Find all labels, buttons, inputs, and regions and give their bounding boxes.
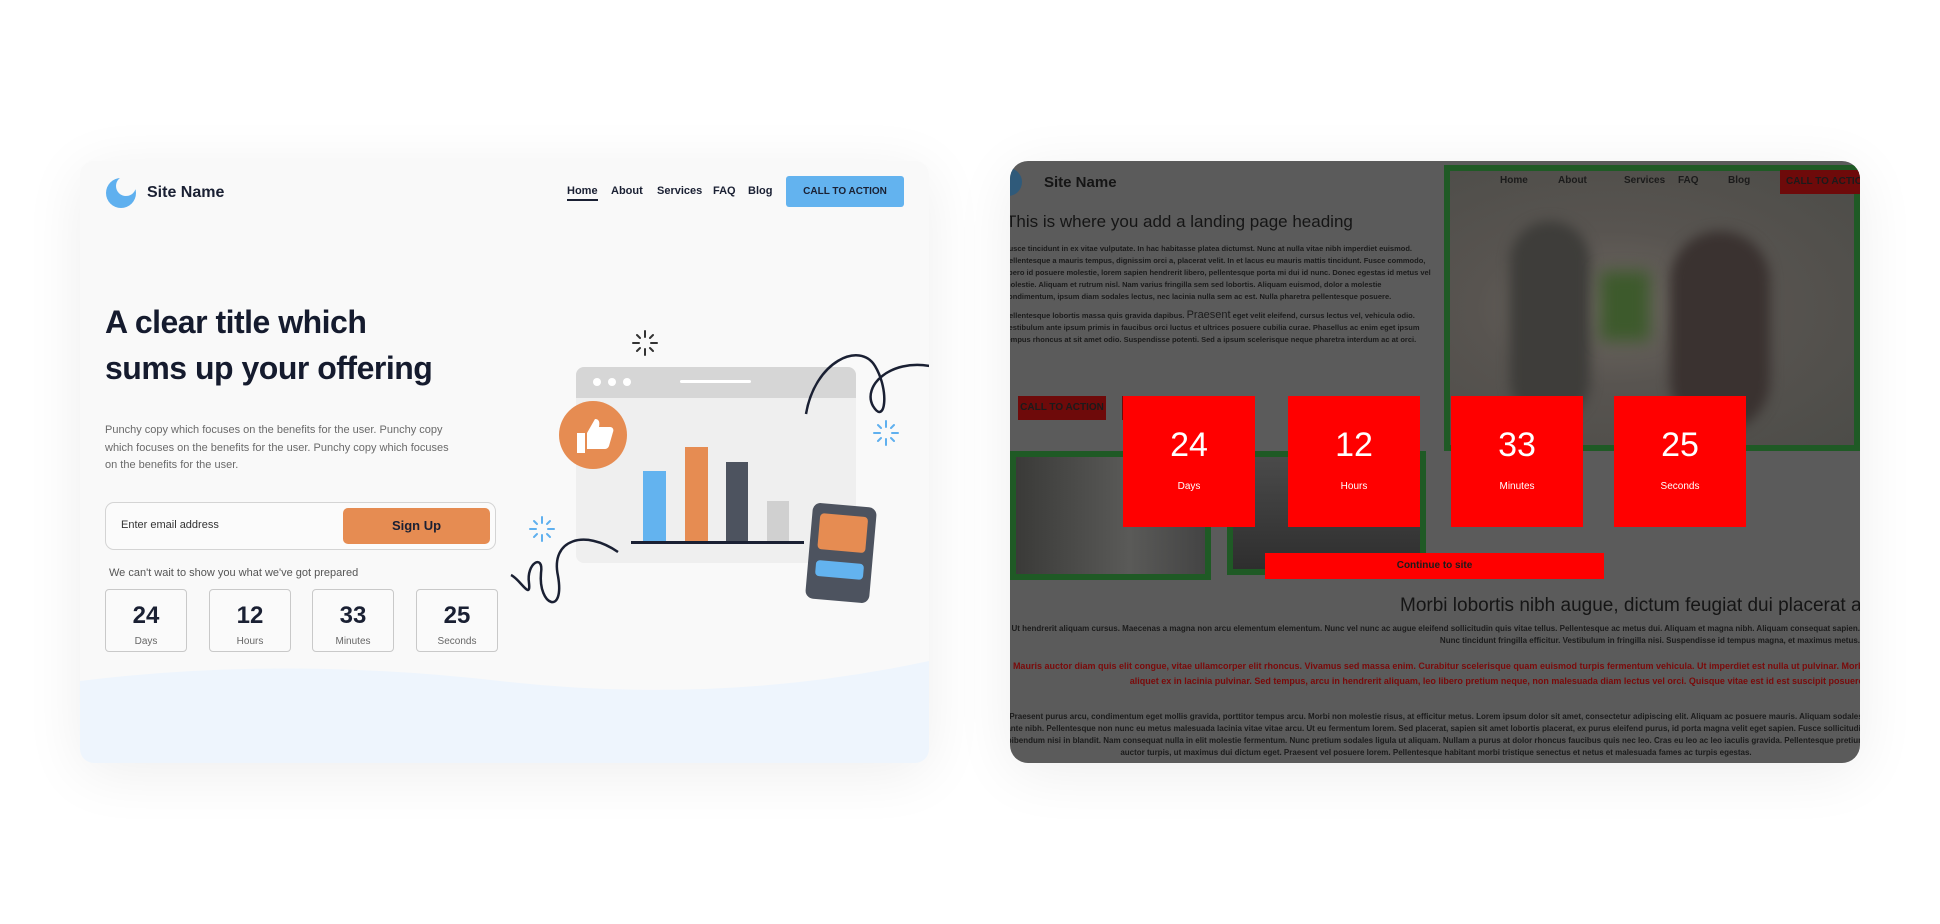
countdown red boxes: Hours [1341, 481, 1367, 492]
title [105, 304, 432, 386]
button: continue to site [1265, 553, 1604, 579]
navigation: About [611, 185, 643, 197]
countdown red boxes: Minutes [1499, 481, 1534, 492]
countdown boxes [105, 589, 498, 652]
paragraph block: Ut hendrerit aliquam cursus. Maecenas a magna non arcu elementum elementum. Nunc vel nunc ac augue eleifend sollicitudin quis vitae tellus. Pellentesque ac metus dui. Aliquam et magna nibh. Aliquam consequat sapien. Nunc tincidunt fringilla efficitur. Vestibulum in fringilla nisi. Suspendisse id tempus magna, et maximus metus. [1011, 624, 1860, 645]
navigation: Blog [748, 185, 772, 197]
countdown boxes: Hours [237, 636, 263, 647]
countdown red boxes: 24 [1170, 426, 1208, 464]
button: dark red CTA: CALL TO ACTION [1020, 402, 1104, 413]
navigation: Home [567, 185, 598, 197]
button: continue to site: Continue to site [1397, 560, 1472, 571]
photo: lower left [1010, 451, 1211, 580]
title: A clear title which [105, 304, 366, 340]
button: call to action [1780, 170, 1860, 194]
navigation: Services [657, 185, 702, 197]
navigation: Home [1500, 175, 1528, 186]
navigation: Blog [1728, 175, 1750, 186]
photo: lower middle [1227, 451, 1426, 575]
text block [1010, 244, 1431, 344]
countdown boxes: 25 [444, 602, 470, 629]
countdown red boxes: 12 [1335, 426, 1373, 464]
button: sign up: Sign Up [392, 518, 441, 533]
countdown boxes: 33 [340, 602, 366, 629]
countdown red boxes [1123, 396, 1746, 527]
title: sums up your offering [105, 350, 432, 386]
countdown boxes: 12 [237, 602, 263, 629]
heading: This is where you add a landing page heading [1010, 212, 1353, 231]
wave background [80, 661, 929, 763]
navigation: About [1558, 175, 1587, 186]
logo: Site Name [147, 184, 224, 201]
countdown red boxes: 33 [1498, 426, 1536, 464]
navigation [1500, 170, 1860, 194]
paragraph block: Praesent purus arcu, condimentum eget mollis gravida, porttitor tempus arcu. Morbi non molestie risus, at efficitur metus. Lorem ipsum dolor sit amet, consectetur adipiscing elit. Aliquam ac posuere mauris. Aliquam sodales ante nibh. Pellentesque non nunc eu metus malesuada lacinia vitae vitae arcu. Ut eu fermentum lorem. Sed placerat, sapien sit amet lobortis placerat, ex purus eleifend purus, id porta magna velit eget sapien. Fusce sollicitudin bibendum nisi in blandit. Nam consequat nulla in elit molestie fermentum. Nunc pretium sodales ligula ut aliquam. Nullam a purus at dolor rhoncus faucibus quis nec leo. Cras eu leo ac leo iaculis gravida. Pellentesque pretium auctor turpis, ut maximus dui dictum eget. Praesent vel posuere lorem. Pellentesque habitant morbi tristique senectus et netus et malesuada fames ac turpis egestas. [1010, 712, 1860, 757]
logo [1010, 169, 1117, 196]
countdown boxes: 24 [133, 602, 159, 629]
button: dark red CTA [1018, 396, 1106, 420]
button: sign up [343, 508, 490, 544]
navigation: Services [1624, 175, 1665, 186]
button: call to action [786, 176, 904, 207]
text block: Pellentesque lobortis massa quis gravida dapibus. Praesent eget velit eleifend, cursus lectus vel, vehicula odio. Vestibulum ante ipsum primis in faucibus orci luctus et ultrices posuere cubilia curae. Phasellus ac enim eget ipsum tempus rhoncus at sit amet odio. Suspendisse potenti. Sed a ipsum scelerisque neque pharetra interdum ac at orci. [1010, 309, 1420, 344]
panel: dark broken landing page: TO ACTION [1178, 402, 1232, 413]
email signup form [105, 502, 496, 550]
countdown red boxes: Seconds [1661, 481, 1699, 492]
logo [106, 178, 224, 208]
countdown boxes: Seconds [438, 636, 476, 647]
countdown red boxes: Days [1178, 481, 1200, 492]
logo: Site Name [1044, 174, 1117, 191]
countdown boxes: Minutes [335, 636, 370, 647]
text block: Fusce tincidunt in ex vitae vulputate. In hac habitasse platea dictumst. Nunc at nulla vitae nibh imperdiet euismod. Pellentesque a mauris tempus, dignissim orci a, placerat velit. In et lacus eu mauris mattis tincidunt. Fusce commodo, libero id posuere molestie, lorem sapien hendrerit libero, pellentesque porta mi dui id nunc. Donec egestas id metus vel molestie. Aliquam et rutrum nisl. Nam varius fringilla sem sed lobortis. Aliquam euismod, dolor a molestie condimentum, ipsum diam sodales lectus, nec lacinia nulla sem ac est. Nulla pharetra pellentesque posuere. [1010, 244, 1431, 301]
body copy: Punchy copy which focuses on the benefits for the user. Punchy copy which focuses on the benefits for the user. Punchy copy which focuses on the benefits for the user. [105, 424, 449, 471]
button: call to action: CALL TO ACTION [803, 186, 887, 197]
photo: main blurred image [1444, 165, 1860, 451]
countdown caption: We can't wait to show you what we've got prepared [109, 567, 358, 579]
panel: light landing page [80, 161, 929, 763]
illustration: browser chart [510, 330, 929, 604]
countdown red boxes: 25 [1661, 426, 1699, 464]
email signup form: Enter email address [121, 519, 219, 531]
countdown boxes: Days [135, 636, 157, 647]
panel: dark broken landing page [1010, 161, 1860, 763]
navigation [567, 185, 772, 201]
navigation: FAQ [713, 185, 736, 197]
navigation: FAQ [1678, 175, 1699, 186]
red paragraph: Mauris auctor diam quis elit congue, vitae ullamcorper elit rhoncus. Vivamus sed massa enim. Curabitur scelerisque quam euismod turpis fermentum vehicula. Ut imperdiet est nulla ut pulvinar. Morbi aliquet ex in lacinia pulvinar. Sed tempus, arcu in hendrerit aliquam, leo libero pretium neque, non malesuada diam lectus vel orci. Quisque vitae est id est suscipit posuere. [1013, 661, 1860, 686]
